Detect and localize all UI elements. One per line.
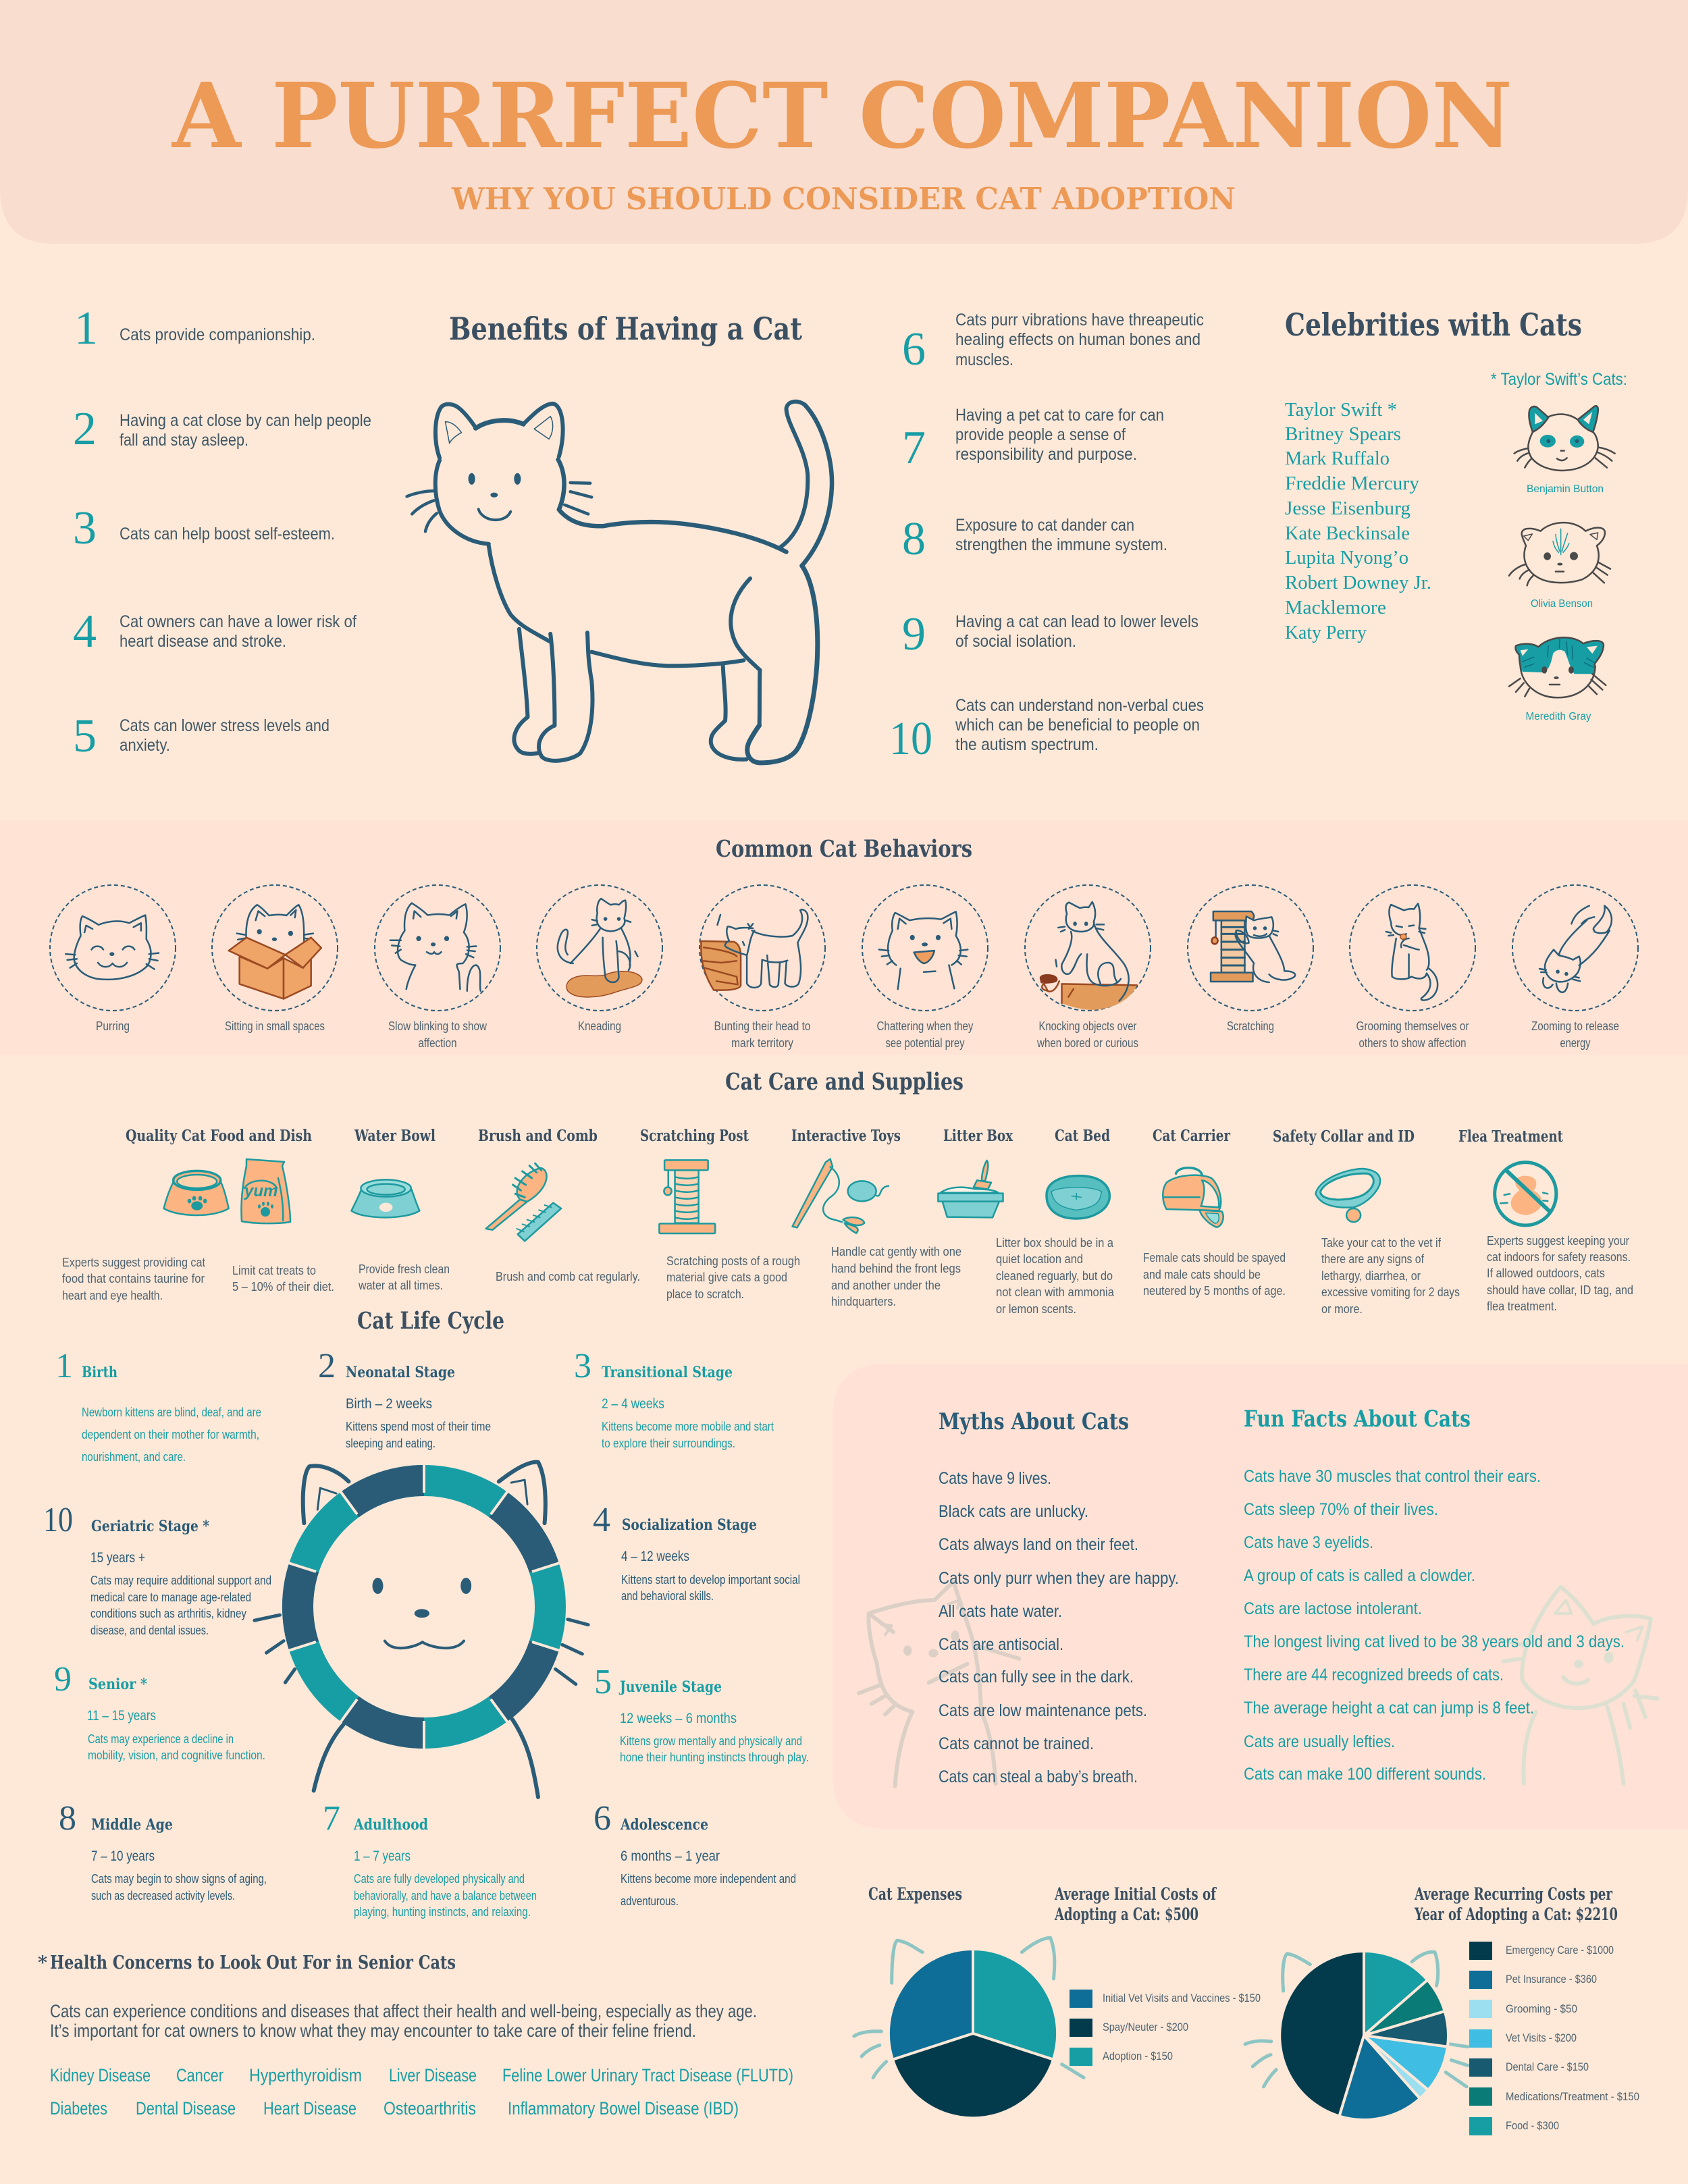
- supply descriptions: not clean with ammonia: [996, 1285, 1115, 1299]
- behavior captions: Kneading: [578, 1019, 621, 1033]
- supply descriptions: food that contains taurine for: [62, 1272, 205, 1285]
- stage 2 neonatal: Neonatal Stage: [346, 1364, 455, 1381]
- panel: cat care and supplies: [62, 1068, 1633, 1316]
- benefit 7: 7: [902, 422, 926, 474]
- supply descriptions: Brush and comb cat regularly.: [496, 1270, 640, 1283]
- stage 10 geriatric: conditions such as arthritis, kidney: [90, 1607, 246, 1620]
- behavior captions: Purring: [96, 1019, 130, 1033]
- stage 4 socialization: 4: [593, 1501, 610, 1539]
- list of myths: Black cats are unlucky.: [939, 1502, 1088, 1521]
- icon: chattering cat: [879, 911, 968, 989]
- supply descriptions: hindquarters.: [831, 1295, 896, 1308]
- legend: initial costs: Adoption - $150: [1103, 2050, 1173, 2062]
- list of myths: Cats can fully see in the dark.: [939, 1668, 1134, 1686]
- benefit 7: provide people a sense of: [955, 425, 1126, 444]
- heading: health concerns: *: [38, 1952, 47, 1973]
- panel: cat life cycle: [43, 1307, 809, 1919]
- list of celebrities: Mark Ruffalo: [1285, 448, 1390, 469]
- list of diseases: Cancer: [176, 2065, 223, 2085]
- icon: food dish: [164, 1171, 229, 1215]
- legend: recurring costs: Emergency Care - $1000: [1506, 1944, 1614, 1956]
- heading: recurring costs: [1414, 1884, 1618, 1924]
- stage 9 senior: 11 – 15 years: [87, 1708, 156, 1724]
- paragraph: health concerns: [50, 2001, 757, 2041]
- heading: benefits: Benefits of Having a Cat: [449, 311, 803, 347]
- supply descriptions: Take your cat to the vet if: [1321, 1236, 1442, 1250]
- heading: initial costs: Average Initial Costs of: [1054, 1884, 1217, 1904]
- icon: zooming cat: [1539, 906, 1612, 992]
- stage 5 juvenile: Juvenile Stage: [618, 1678, 722, 1696]
- heading: recurring costs: Average Recurring Costs per: [1414, 1884, 1613, 1904]
- icon: Meredith Gray cat: [1509, 637, 1606, 697]
- stage 8 middle age: [59, 1799, 267, 1902]
- supply headings: Cat Carrier: [1153, 1127, 1231, 1145]
- list of myths: Cats are antisocial.: [939, 1635, 1063, 1654]
- supply descriptions: water at all times.: [358, 1279, 443, 1292]
- icon: food bag: yum: [244, 1182, 278, 1200]
- list of myths: [939, 1469, 1179, 1786]
- benefit 9: of social isolation.: [955, 632, 1076, 651]
- supply descriptions: Litter box should be in a: [996, 1236, 1114, 1250]
- supply descriptions: [62, 1234, 1633, 1316]
- supply descriptions: cleaned reguarly, but do: [996, 1269, 1113, 1283]
- icon: food bag: [241, 1159, 290, 1223]
- stage 5 juvenile: [594, 1663, 809, 1764]
- panel: cat expenses: [854, 1884, 1639, 2135]
- behavior captions: mark territory: [731, 1036, 793, 1050]
- benefit 4: 4: [73, 606, 97, 658]
- list of diseases: Dental Disease: [136, 2098, 236, 2119]
- icon: brush and comb: [486, 1163, 561, 1241]
- list of fun facts: Cats can make 100 different sounds.: [1244, 1765, 1486, 1784]
- icon: purring cat: [65, 915, 159, 980]
- benefit 8: 8: [902, 513, 926, 565]
- heading: initial costs: [1054, 1884, 1217, 1924]
- stage 5 juvenile: hone their hunting instincts through play.: [620, 1751, 809, 1764]
- supply descriptions: Limit cat treats to: [232, 1264, 316, 1277]
- supply headings: Flea Treatment: [1458, 1127, 1563, 1146]
- behavior captions: Scratching: [1227, 1019, 1274, 1033]
- chart: life cycle ring cat: [255, 1462, 588, 1797]
- benefit 5: [73, 710, 329, 762]
- supply descriptions: material give cats a good: [666, 1271, 787, 1284]
- behavior captions: affection: [419, 1036, 456, 1050]
- list of celebrities: Freddie Mercury: [1285, 473, 1419, 494]
- list of fun facts: There are 44 recognized breeds of cats.: [1244, 1666, 1504, 1684]
- stage 6 adolescence: Adolescence: [620, 1816, 708, 1834]
- panel: benefits of having a cat: [73, 302, 1204, 765]
- supply headings: Water Bowl: [354, 1127, 436, 1145]
- supply headings: Cat Bed: [1055, 1127, 1110, 1145]
- benefit 6: [902, 311, 1204, 375]
- benefit 10: the autism spectrum.: [955, 735, 1099, 754]
- icon: flea treatment: [1495, 1163, 1556, 1225]
- benefit 7: Having a pet cat to care for can: [955, 406, 1164, 425]
- supply descriptions: and male cats should be: [1143, 1268, 1261, 1281]
- panel: celebrities with cats: [1285, 307, 1627, 722]
- stage 9 senior: [54, 1660, 265, 1762]
- stage 10 geriatric: 15 years +: [90, 1550, 145, 1566]
- caption: Meredith Gray: Meredith Gray: [1526, 711, 1591, 722]
- stage 9 senior: Senior *: [88, 1676, 147, 1693]
- stage 7 adulthood: Cats are fully developed physically and: [354, 1872, 525, 1886]
- benefit 4: heart disease and stroke.: [120, 632, 286, 651]
- supply descriptions: excessive vomiting for 2 days: [1321, 1285, 1460, 1299]
- list of diseases: Diabetes: [50, 2098, 107, 2119]
- supply descriptions: If allowed outdoors, cats: [1487, 1267, 1605, 1280]
- icon: kneading cat: [558, 899, 642, 997]
- supply descriptions: heart and eye health.: [62, 1289, 163, 1302]
- legend: recurring costs: Vet Visits - $200: [1506, 2031, 1577, 2044]
- list of myths: Cats only purr when they are happy.: [939, 1569, 1179, 1588]
- supply headings: Litter Box: [943, 1127, 1013, 1145]
- benefit 6: Cats purr vibrations have threapeutic: [955, 311, 1204, 329]
- subtitle: WHY YOU SHOULD CONSIDER CAT ADOPTION: [451, 181, 1236, 217]
- legend: recurring costs: Food - $300: [1506, 2119, 1559, 2132]
- supply descriptions: flea treatment.: [1487, 1300, 1557, 1313]
- stage 5 juvenile: Kittens grow mentally and physically and: [620, 1734, 802, 1748]
- behavior captions: Chattering when they: [876, 1019, 974, 1033]
- benefit 1: 1: [74, 302, 98, 354]
- list of myths: Cats cannot be trained.: [939, 1734, 1094, 1753]
- stage 7 adulthood: 7: [323, 1799, 340, 1838]
- list of myths: Cats can steal a baby’s breath.: [939, 1767, 1138, 1786]
- benefit 9: 9: [902, 608, 926, 660]
- stage 5 juvenile: 5: [594, 1663, 612, 1701]
- supply descriptions: should have collar, ID tag, and: [1487, 1283, 1633, 1297]
- decorative cat: right: [1500, 1587, 1658, 1784]
- legend: initial costs: [1070, 1990, 1261, 2066]
- benefit 1: Cats provide companionship.: [120, 325, 315, 344]
- benefit 2: Having a cat close by can help people: [120, 411, 371, 430]
- list of diseases: [50, 2065, 793, 2119]
- stage 1 birth: nourishment, and care.: [82, 1450, 186, 1464]
- behavior captions: Bunting their head to: [714, 1019, 810, 1033]
- list of fun facts: Cats sleep 70% of their lives.: [1244, 1500, 1438, 1519]
- stage 5 juvenile: 12 weeks – 6 months: [620, 1711, 737, 1726]
- icon: cat in a box: [229, 905, 321, 998]
- list of diseases: Feline Lower Urinary Tract Disease (FLUTD): [502, 2065, 793, 2085]
- supply headings: Interactive Toys: [791, 1127, 901, 1145]
- legend: initial costs: Spay/Neuter - $200: [1103, 2021, 1188, 2033]
- supply descriptions: Experts suggest keeping your: [1487, 1234, 1629, 1248]
- icon: safety collar: [1316, 1169, 1380, 1222]
- stage 7 adulthood: playing, hunting instincts, and relaxing.: [354, 1905, 531, 1919]
- stage 7 adulthood: 1 – 7 years: [354, 1848, 411, 1864]
- benefit 7: responsibility and purpose.: [955, 445, 1137, 464]
- list of diseases: Inflammatory Bowel Disease (IBD): [508, 2098, 739, 2119]
- stage 8 middle age: Cats may begin to show signs of aging,: [91, 1872, 267, 1886]
- legend: recurring costs: Grooming - $50: [1506, 2002, 1577, 2015]
- stage 6 adolescence: Kittens become more independent and: [621, 1872, 796, 1886]
- stage 7 adulthood: Adulthood: [353, 1816, 428, 1834]
- stage 2 neonatal: sleeping and eating.: [346, 1437, 436, 1450]
- list of celebrities: Jesse Eisenburg: [1285, 498, 1410, 519]
- stage 1 birth: Newborn kittens are blind, deaf, and are: [82, 1406, 261, 1419]
- benefit 6: healing effects on human bones and: [955, 330, 1201, 349]
- icon: litter box: [938, 1161, 1003, 1217]
- icon: interactive toy wand: [793, 1159, 889, 1233]
- stage 10 geriatric: disease, and dental issues.: [90, 1624, 209, 1637]
- benefit 8: Exposure to cat dander can: [955, 516, 1134, 535]
- supply headings: [126, 1127, 1563, 1146]
- benefit 10: which can be beneficial to people on: [955, 716, 1200, 735]
- icon: water bowl: [351, 1179, 419, 1217]
- benefit 6: muscles.: [955, 350, 1013, 369]
- stage 10 geriatric: Geriatric Stage *: [91, 1518, 209, 1535]
- supply headings: Quality Cat Food and Dish: [126, 1127, 312, 1145]
- stage 3 transitional: Kittens become more mobile and start: [602, 1420, 774, 1433]
- list of myths: Cats always land on their feet.: [939, 1535, 1138, 1554]
- list of fun facts: [1244, 1467, 1625, 1784]
- legend: recurring costs: Medications/Treatment - $150: [1506, 2090, 1639, 2103]
- list of fun facts: Cats are lactose intolerant.: [1244, 1599, 1422, 1618]
- list of fun facts: Cats are usually lefties.: [1244, 1732, 1395, 1751]
- stage 1 birth: [55, 1347, 261, 1464]
- panel: health concerns: [38, 1952, 793, 2119]
- benefit 5: anxiety.: [120, 736, 170, 755]
- icon: cat carrier: [1163, 1168, 1223, 1227]
- supply descriptions: neutered by 5 months of age.: [1143, 1284, 1286, 1298]
- panel: myths and fun facts: [833, 1364, 1688, 1829]
- benefit 5: Cats can lower stress levels and: [120, 716, 329, 735]
- list of celebrities: [1285, 399, 1431, 643]
- stage 1 birth: dependent on their mother for warmth,: [82, 1428, 259, 1441]
- supply descriptions: place to scratch.: [666, 1287, 744, 1301]
- heading: initial costs: Adopting a Cat: $500: [1054, 1905, 1198, 1924]
- legend: recurring costs: [1469, 1942, 1639, 2135]
- behavior captions: others to show affection: [1359, 1036, 1467, 1050]
- supply descriptions: 5 – 10% of their diet.: [232, 1280, 334, 1294]
- list of celebrities: Kate Beckinsale: [1285, 523, 1410, 544]
- icon: grooming cat: [1386, 903, 1438, 1001]
- benefit 10: 10: [889, 713, 932, 765]
- list of diseases: Osteoarthritis: [384, 2098, 476, 2119]
- list of celebrities: Robert Downey Jr.: [1285, 572, 1431, 593]
- legend: recurring costs: Dental Care - $150: [1506, 2060, 1589, 2073]
- icon: cat knocking objects: [1040, 902, 1137, 1010]
- supply descriptions: and another under the: [831, 1279, 941, 1292]
- stage 8 middle age: 8: [59, 1799, 76, 1838]
- stage 7 adulthood: behaviorally, and have a balance between: [354, 1889, 537, 1902]
- behavior captions: energy: [1560, 1036, 1591, 1050]
- stage 3 transitional: [574, 1347, 774, 1450]
- stage 6 adolescence: 6 months – 1 year: [621, 1848, 720, 1864]
- supply descriptions: Scratching posts of a rough: [666, 1254, 800, 1268]
- stage 10 geriatric: [43, 1501, 271, 1637]
- icon: cat outline around recurring pie: [1245, 1952, 1468, 2087]
- stage 8 middle age: 7 – 10 years: [91, 1848, 155, 1864]
- stage 10 geriatric: Cats may require additional support and: [90, 1574, 271, 1587]
- header band: [0, 0, 1688, 244]
- list of diseases: Hyperthyroidism: [249, 2065, 362, 2085]
- benefit 4: Cat owners can have a lower risk of: [120, 612, 357, 631]
- icon: slow blinking cat: [390, 903, 481, 991]
- behavior captions: when bored or curious: [1036, 1036, 1138, 1050]
- benefit 2: [73, 403, 371, 455]
- benefit 8: strengthen the immune system.: [955, 535, 1167, 554]
- legend: recurring costs: Pet Insurance - $360: [1506, 1973, 1597, 1986]
- list of celebrities: Lupita Nyong’o: [1285, 547, 1408, 568]
- stage 8 middle age: Middle Age: [91, 1816, 173, 1834]
- behavior captions: [96, 1019, 1619, 1050]
- benefit 3: [73, 502, 335, 554]
- stage 4 socialization: and behavioral skills.: [621, 1589, 714, 1603]
- stage 3 transitional: to explore their surroundings.: [602, 1437, 735, 1450]
- heading: celebrities: Celebrities with Cats: [1285, 307, 1582, 343]
- behavior captions: Grooming themselves or: [1356, 1019, 1469, 1033]
- stage 4 socialization: Socialization Stage: [622, 1516, 757, 1534]
- benefit 2: fall and stay asleep.: [120, 431, 248, 450]
- stage 3 transitional: 3: [574, 1347, 591, 1385]
- supply descriptions: Experts suggest providing cat: [62, 1256, 205, 1269]
- heading: myths: Myths About Cats: [939, 1408, 1129, 1435]
- panel: common cat behaviors: [0, 820, 1688, 1055]
- stage 6 adolescence: 6: [594, 1799, 611, 1838]
- supply descriptions: or more.: [1321, 1302, 1363, 1316]
- supply descriptions: there are any signs of: [1321, 1252, 1425, 1266]
- icon: scratching post: [659, 1160, 715, 1233]
- stage 9 senior: 9: [54, 1660, 72, 1699]
- paragraph: health concerns: Cats can experience conditions and diseases that affect their health and well-being, especially as they age.: [50, 2001, 757, 2021]
- caption: Benjamin Button: Benjamin Button: [1527, 483, 1604, 495]
- stage 6 adolescence: [594, 1799, 796, 1908]
- list of celebrities: Macklemore: [1285, 597, 1386, 618]
- heading: health concerns: Health Concerns to Look Out For in Senior Cats: [50, 1952, 456, 1973]
- list of celebrities: Taylor Swift *: [1285, 399, 1397, 421]
- stage 4 socialization: [593, 1501, 800, 1603]
- heading: life cycle: Cat Life Cycle: [357, 1307, 504, 1335]
- legend: initial costs: Initial Vet Visits and Vaccines - $150: [1103, 1992, 1261, 2004]
- benefit 10: [889, 696, 1204, 765]
- list of fun facts: The longest living cat lived to be 38 years old and 3 days.: [1244, 1632, 1625, 1651]
- supply descriptions: or lemon scents.: [996, 1302, 1076, 1316]
- stage 1 birth: 1: [55, 1347, 73, 1385]
- list of myths: Cats have 9 lives.: [939, 1469, 1051, 1488]
- list of diseases: Liver Disease: [389, 2065, 477, 2085]
- stage 2 neonatal: 2: [318, 1347, 336, 1385]
- stage 9 senior: mobility, vision, and cognitive function.: [88, 1749, 265, 1762]
- supply headings: Safety Collar and ID: [1273, 1127, 1415, 1146]
- stage 3 transitional: Transitional Stage: [602, 1364, 733, 1381]
- heading: cat expenses: Cat Expenses: [868, 1884, 962, 1904]
- pie chart: recurring costs: [1280, 1951, 1448, 2120]
- supply descriptions: Provide fresh clean: [359, 1262, 450, 1276]
- behavior captions: see potential prey: [886, 1036, 964, 1050]
- stage 10 geriatric: medical care to manage age-related: [90, 1591, 251, 1604]
- list of fun facts: A group of cats is called a clowder.: [1244, 1566, 1475, 1585]
- benefit 9: [902, 608, 1198, 660]
- icon: bunting cat: [701, 909, 808, 990]
- supply descriptions: hand behind the front legs: [831, 1262, 961, 1275]
- list of fun facts: Cats have 3 eyelids.: [1244, 1533, 1373, 1552]
- benefit 3: 3: [73, 502, 97, 554]
- stage 3 transitional: 2 – 4 weeks: [602, 1396, 664, 1412]
- stage 10 geriatric: 10: [43, 1501, 73, 1539]
- behavior captions: Knocking objects over: [1038, 1019, 1137, 1033]
- heading: behaviors: Common Cat Behaviors: [716, 835, 972, 863]
- benefit 5: 5: [73, 710, 97, 762]
- benefit 6: 6: [902, 323, 926, 375]
- decorative cat: left: [859, 1582, 1019, 1786]
- benefit 8: [902, 513, 1167, 565]
- list of myths: Cats are low maintenance pets.: [939, 1701, 1147, 1720]
- behavior captions: Sitting in small spaces: [225, 1019, 325, 1033]
- behavior captions: Zooming to release: [1531, 1019, 1619, 1033]
- benefit 10: Cats can understand non-verbal cues: [955, 696, 1204, 715]
- icon: cat outline around initial pie: [854, 1938, 1084, 2077]
- stage 1 birth: Birth: [82, 1364, 117, 1381]
- supply descriptions: cat indoors for safety reasons.: [1487, 1250, 1631, 1264]
- stage 2 neonatal: Kittens spend most of their time: [346, 1420, 491, 1433]
- dashed circles: [50, 885, 1638, 1011]
- list of diseases: Kidney Disease: [50, 2065, 151, 2085]
- list of fun facts: Cats have 30 muscles that control their ears.: [1244, 1467, 1541, 1486]
- benefit 2: 2: [73, 403, 97, 455]
- behavior captions: Slow blinking to show: [388, 1019, 487, 1033]
- list of myths: All cats hate water.: [939, 1602, 1062, 1621]
- list of diseases: Heart Disease: [263, 2098, 357, 2119]
- benefit 4: [73, 606, 357, 658]
- stage 8 middle age: such as decreased activity levels.: [91, 1889, 235, 1902]
- illustration: large standing cat: [407, 402, 832, 763]
- list of celebrities: Katy Perry: [1285, 622, 1367, 643]
- stage 2 neonatal: Birth – 2 weeks: [346, 1396, 432, 1412]
- supply descriptions: Handle cat gently with one: [831, 1245, 961, 1258]
- benefit 7: [902, 406, 1164, 474]
- supply descriptions: quiet location and: [996, 1252, 1083, 1266]
- icon: scratching cat: [1211, 911, 1295, 982]
- caption: Olivia Benson: Olivia Benson: [1531, 598, 1593, 610]
- benefit 1: [74, 302, 315, 354]
- supply descriptions: Female cats should be spayed: [1143, 1251, 1286, 1264]
- icon: cat bed: [1047, 1176, 1109, 1219]
- heading: fun facts: Fun Facts About Cats: [1244, 1406, 1471, 1433]
- icon: Olivia Benson cat: [1509, 523, 1610, 585]
- title: A PURRFECT COMPANION: [171, 63, 1512, 169]
- stage 4 socialization: 4 – 12 weeks: [621, 1549, 689, 1564]
- icon: Benjamin Button cat: [1514, 406, 1615, 471]
- heading: cat care: Cat Care and Supplies: [725, 1068, 964, 1096]
- list of fun facts: The average height a cat can jump is 8 feet.: [1244, 1699, 1534, 1717]
- pie chart: initial costs: [889, 1949, 1057, 2118]
- label: Taylor Swift's cats: * Taylor Swift’s Cats:: [1491, 370, 1627, 389]
- paragraph: health concerns: It’s important for cat owners to know what they may encounter to take care of their feline friend.: [50, 2021, 696, 2041]
- stage 2 neonatal: [318, 1347, 491, 1450]
- supply descriptions: lethargy, diarrhea, or: [1321, 1269, 1421, 1283]
- supply headings: Scratching Post: [640, 1127, 749, 1145]
- stage 4 socialization: Kittens start to develop important social: [621, 1573, 800, 1587]
- stage 7 adulthood: [323, 1799, 537, 1919]
- list of celebrities: Britney Spears: [1285, 423, 1401, 445]
- benefit 9: Having a cat can lead to lower levels: [955, 612, 1198, 631]
- stage 6 adolescence: adventurous.: [621, 1894, 679, 1908]
- stage 9 senior: Cats may experience a decline in: [88, 1732, 234, 1746]
- supply headings: Brush and Comb: [478, 1127, 598, 1145]
- benefit 3: Cats can help boost self-esteem.: [120, 525, 335, 543]
